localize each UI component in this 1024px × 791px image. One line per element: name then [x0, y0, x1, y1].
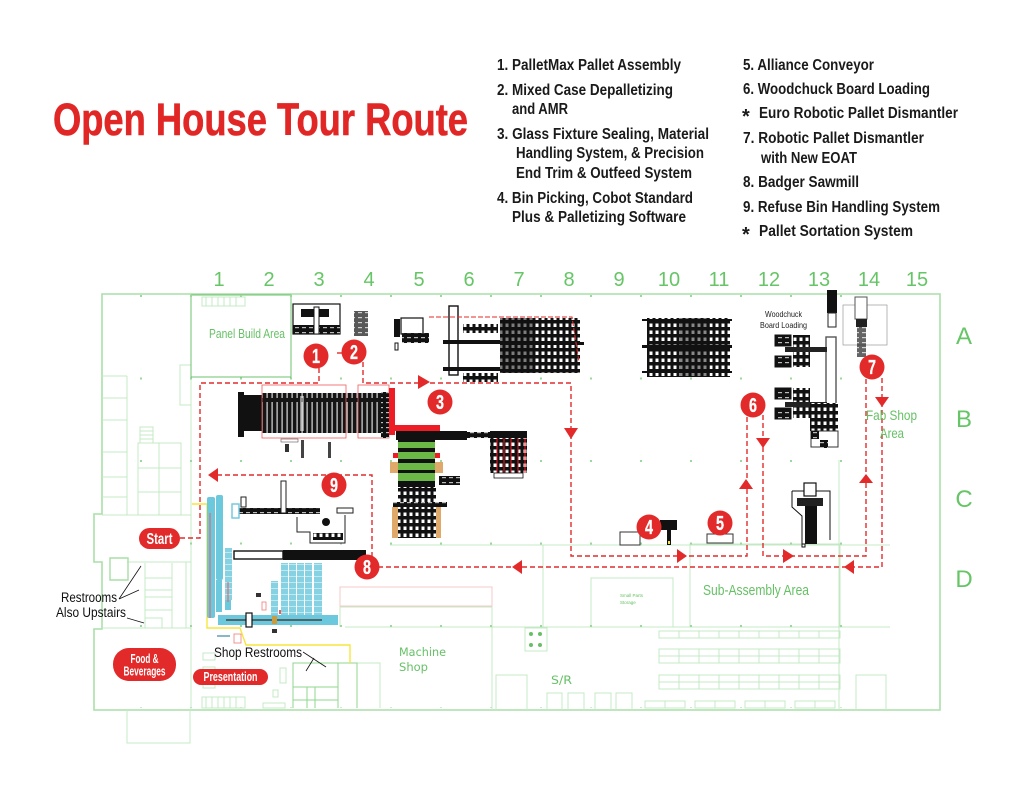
title: Open House Tour Route: [53, 94, 468, 145]
badge 3: 3: [436, 392, 444, 414]
badge 7: [860, 354, 884, 380]
machine: precision end trim: [490, 431, 527, 478]
restrooms callout: [56, 566, 144, 623]
grid row letters: B: [956, 406, 972, 433]
badge 8: 8: [363, 557, 371, 579]
legend: left column: Plus & Palletizing Software: [512, 209, 686, 226]
badge 4: 4: [645, 517, 654, 539]
grid column numbers: 10: [658, 269, 680, 291]
grid column numbers: 15: [906, 269, 928, 291]
grid column numbers: 13: [808, 269, 830, 291]
grid column numbers: 14: [858, 269, 880, 291]
machine: badger sawmill bar: [234, 550, 366, 560]
badge 9: 9: [330, 475, 338, 497]
legend: right column: Pallet Sortation System: [759, 223, 913, 240]
woodchuck board loading label: Woodchuck: [765, 310, 803, 319]
badge 1: 1: [312, 346, 320, 368]
grid column numbers: 1: [213, 269, 225, 291]
tour route dashed line: [180, 317, 882, 567]
machine: glass fixture line: [390, 425, 490, 538]
food and beverages pill: Beverages: [124, 664, 166, 678]
start pill: [139, 528, 180, 549]
area labels: Fab Shop: [866, 407, 917, 423]
legend: right column: Euro Robotic Pallet Dismantler: [759, 105, 958, 122]
legend: right column: 7. Robotic Pallet Dismantler: [743, 130, 924, 147]
machine: cell 5A: [394, 318, 429, 350]
restrooms callout: Also Upstairs: [56, 605, 126, 620]
start pill: Start: [146, 531, 173, 548]
machine: PalletMax assembly line B: [238, 385, 395, 458]
grid column numbers: 8: [563, 269, 575, 291]
food and beverages pill: Food &: [130, 651, 158, 666]
legend: right column: 9. Refuse Bin Handling System: [743, 199, 940, 216]
area labels: Small Parts: [620, 593, 644, 598]
area labels: S/R: [551, 673, 572, 687]
legend: right column: 6. Woodchuck Board Loading: [743, 81, 930, 98]
legend: left column: and AMR: [512, 101, 568, 118]
machine: top conveyor 10-11A: [642, 318, 732, 377]
grid column numbers: 6: [463, 269, 475, 291]
area labels: Sub-Assembly Area: [703, 582, 810, 599]
shop restrooms callout: [214, 645, 326, 671]
area labels: Shop: [399, 660, 428, 674]
machine: refuse bin handling: [232, 481, 353, 543]
route arrows: [208, 375, 889, 574]
area labels: Area: [880, 425, 904, 441]
badge 4: [636, 514, 662, 540]
presentation pill: [193, 669, 268, 685]
grid row letters: [955, 323, 973, 593]
grid column numbers: 5: [413, 269, 425, 291]
area labels: Machine: [399, 645, 446, 659]
legend: left column: 2. Mixed Case Depalletizing: [497, 82, 673, 99]
woodchuck board loading label: [760, 310, 807, 330]
machine: top conveyor 6-8A: [443, 306, 584, 382]
legend: left column: 1. PalletMax Pallet Assembly: [497, 57, 681, 74]
badge 9: [322, 472, 346, 498]
legend: left column: 3. Glass Fixture Sealing, Material: [497, 126, 709, 143]
legend: right column: 8. Badger Sawmill: [743, 174, 859, 191]
machine: Woodchuck board loading: [775, 290, 838, 448]
grid column numbers: 7: [513, 269, 525, 291]
machine: cyan pallet system: [207, 495, 338, 643]
grid column numbers: 4: [363, 269, 375, 291]
area labels: [209, 326, 917, 687]
machine: bin picking cell: [620, 520, 677, 545]
grid column numbers: 9: [613, 269, 625, 291]
shop restrooms callout: Shop Restrooms: [214, 645, 302, 660]
grid row letters: C: [955, 486, 973, 513]
grid column numbers: 12: [758, 269, 780, 291]
grid row letters: A: [956, 323, 972, 350]
yellow utility line: [192, 504, 350, 663]
legend: left column: [497, 57, 709, 226]
legend: right column: with New EOAT: [760, 150, 857, 167]
food and beverages pill: [113, 648, 176, 681]
badge 5: [708, 510, 732, 536]
legend: right column: 5. Alliance Conveyor: [743, 57, 874, 74]
legend: right column: [742, 57, 958, 246]
legend: left column: End Trim & Outfeed System: [516, 165, 692, 182]
restrooms callout: Restrooms: [61, 590, 117, 605]
floor plan walls: [94, 294, 940, 743]
area labels: Storage: [620, 600, 636, 605]
grid column numbers: 2: [263, 269, 275, 291]
grid column numbers: [213, 269, 928, 291]
grid column numbers: 3: [313, 269, 325, 291]
machine: PalletMax row A: [293, 304, 368, 336]
presentation pill: Presentation: [204, 669, 258, 684]
legend: left column: Handling System, & Precision: [516, 145, 704, 162]
badge 3: [428, 390, 452, 414]
badge 8: [354, 554, 380, 580]
machine: robotic pallet dismantler 14A: [843, 297, 887, 357]
grid row letters: D: [955, 566, 973, 593]
machine: euro dismantler 13C: [792, 483, 830, 547]
badge 7: 7: [868, 357, 876, 379]
legend: right column: *: [742, 106, 750, 128]
badge 2: [342, 340, 366, 364]
badge 5: 5: [716, 513, 724, 535]
grid column numbers: 11: [709, 269, 729, 291]
legend: right column: *: [742, 224, 750, 246]
badge 1: [304, 344, 328, 368]
legend: left column: 4. Bin Picking, Cobot Standard: [497, 190, 693, 207]
machine: alliance conveyor: [707, 534, 733, 543]
badge 6: [740, 392, 766, 418]
woodchuck board loading label: Board Loading: [760, 321, 807, 330]
badge 6: 6: [749, 395, 757, 417]
small parts cluster: [529, 632, 542, 647]
area labels: Panel Build Area: [209, 326, 286, 341]
badge 2: 2: [350, 342, 358, 364]
